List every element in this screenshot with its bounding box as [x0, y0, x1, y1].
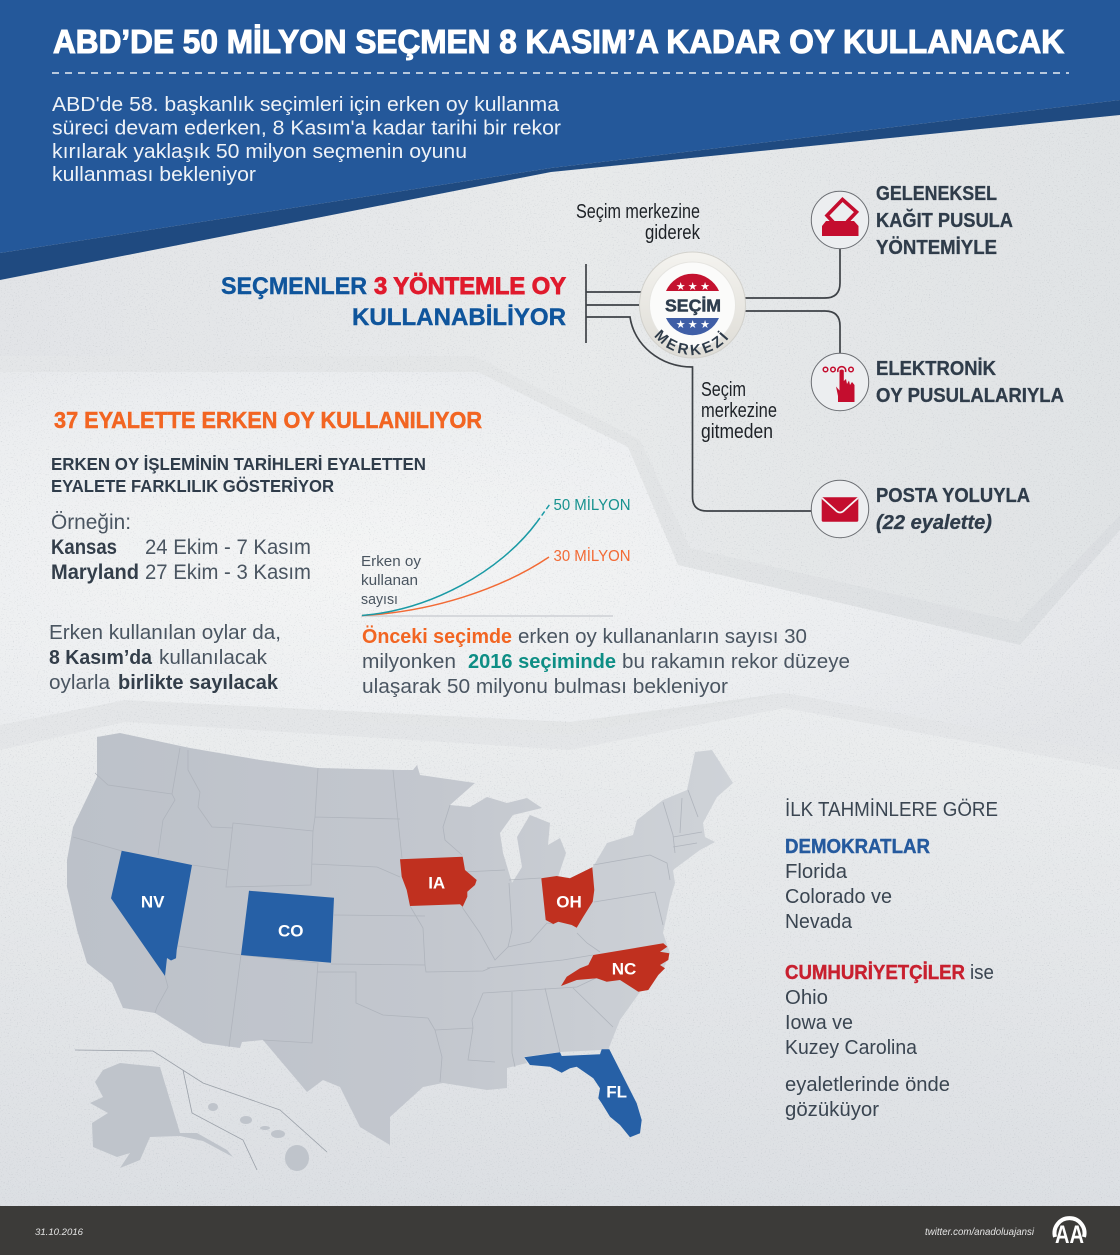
state: North Carolina	[561, 943, 669, 992]
footer	[0, 1206, 1120, 1255]
state: North Carolina: NC	[612, 960, 636, 978]
text: counting of early votes: kullanılacak	[159, 647, 268, 669]
subheading: early voting dates: ERKEN OY İŞLEMİNİN TARİHLERİ EYALETTEN	[51, 454, 426, 474]
logo: AA: AA	[1055, 1221, 1084, 1249]
heading: three methods: 3 YÖNTEMLE OY	[374, 273, 566, 300]
text: state date examples	[51, 511, 311, 584]
text: comparison with previous election: bu rakamın rekor düzeye	[622, 651, 850, 673]
heading: three methods	[221, 273, 566, 331]
state: Ohio	[541, 867, 594, 928]
badge: election centre: ★	[688, 280, 698, 293]
text: comparison with previous election	[362, 625, 850, 698]
date: 31.10.2016	[35, 1227, 84, 1238]
text: comparison with previous election: erken oy kullananların sayısı 30	[518, 626, 807, 648]
label: going to the polling station: Seçim merkezine	[576, 201, 700, 223]
label: paper ballot: KAĞIT PUSULA	[876, 208, 1013, 232]
text: state date examples: Maryland	[51, 561, 139, 584]
label: without going to the polling station: merkezine	[701, 400, 777, 422]
text: counting of early votes: birlikte sayılacak	[118, 672, 279, 694]
Republicans list: CUMHURİYETÇİLER	[785, 961, 966, 984]
label: by mail: POSTA YOLUYLA	[876, 485, 1030, 507]
text: state date examples: 24 Ekim - 7 Kasım	[145, 536, 311, 559]
heading: early voting in 37 states: 37 EYALETTE ERKEN OY KULLANILIYOR	[54, 407, 482, 433]
intro text: kırılarak yaklaşık 50 milyon seçmenin oyunu	[52, 140, 467, 163]
Democrats list: Florida	[785, 861, 848, 883]
line chart: early voters: sayısı	[361, 591, 398, 608]
Democrats list	[785, 836, 931, 933]
text: counting of early votes: oylarla	[49, 672, 111, 694]
state: Iowa: IA	[428, 874, 445, 892]
badge: election centre: MERKEZİ	[654, 330, 728, 356]
label: by mail	[876, 485, 1030, 534]
Republicans list: Ohio	[785, 987, 828, 1009]
Republicans list: Kuzey Carolina	[785, 1037, 918, 1059]
text: first estimates: İLK TAHMİNLERE GÖRE	[785, 798, 998, 821]
state: Colorado: CO	[278, 922, 303, 940]
text: counting of early votes: Erken kullanılan oylar da,	[49, 622, 281, 644]
label: by mail: (22 eyalette)	[876, 512, 992, 534]
text: first estimates: eyaletlerinde önde	[785, 1074, 950, 1096]
state: Nevada: NV	[141, 892, 165, 912]
Republicans list	[785, 961, 994, 1059]
state: Colorado	[241, 891, 334, 963]
state: Florida	[524, 1049, 642, 1137]
badge: election centre: SEÇİM	[665, 296, 721, 316]
badge: election centre: ★	[700, 318, 710, 331]
state: Florida: FL	[606, 1082, 627, 1102]
state: Nevada	[111, 851, 192, 976]
text: first estimates: gözüküyor	[785, 1099, 879, 1121]
line chart: early voters: kullanan	[361, 572, 418, 589]
text: state date examples: Örneğin:	[51, 511, 131, 534]
heading: three methods: KULLANABİLİYOR	[352, 304, 566, 331]
intro text: ABD'de 58. başkanlık seçimleri için erken oy kullanma	[52, 93, 560, 116]
text: counting of early votes: 8 Kasım’da	[49, 647, 153, 669]
label: electronic voting	[876, 357, 1064, 407]
label: without going to the polling station: gitmeden	[701, 421, 773, 443]
header banner	[0, 0, 1120, 280]
text: comparison with previous election: milyonken	[362, 651, 456, 673]
intro text	[52, 93, 561, 186]
Alaska	[90, 1063, 233, 1168]
text: comparison with previous election: Önceki seçimde	[362, 625, 512, 648]
text: comparison with previous election: ulaşarak 50 milyonu bulması bekleniyor	[362, 676, 728, 698]
label: electronic voting: ELEKTRONİK	[876, 357, 997, 380]
label: paper ballot: YÖNTEMİYLE	[876, 236, 997, 259]
line chart: early voters	[361, 495, 630, 616]
Democrats list: DEMOKRATLAR	[785, 836, 931, 858]
Democrats list: Colorado ve	[785, 886, 892, 908]
title: ABD’DE 50 MİLYON SEÇMEN 8 KASIM’A KADAR OY KULLANACAK	[53, 23, 1064, 60]
label: without going to the polling station	[701, 379, 777, 443]
intro text: süreci devam ederken, 8 Kasım'a kadar tarihi bir rekor	[52, 116, 561, 140]
state: Ohio: OH	[556, 892, 582, 912]
Democrats list: Nevada	[785, 911, 853, 933]
badge: election centre: ★	[700, 280, 710, 293]
badge: election centre	[639, 252, 746, 358]
heading: three methods: SEÇMENLER	[221, 273, 367, 300]
intro text: kullanması bekleniyor	[52, 163, 256, 186]
text: first estimates	[785, 798, 998, 1121]
icon: mail envelope	[811, 480, 869, 538]
map: United States	[67, 733, 733, 1171]
label: without going to the polling station: Seçim	[701, 379, 746, 401]
line chart: early voters: 50 MİLYON	[554, 495, 630, 514]
label: going to the polling station	[576, 201, 701, 244]
line chart: early voters: 30 MİLYON	[554, 546, 630, 565]
badge: election centre: ★	[676, 318, 686, 331]
icon: electronic voting	[811, 353, 869, 411]
label: going to the polling station: giderek	[645, 222, 701, 244]
icon: paper ballot	[811, 191, 869, 249]
Republicans list: Iowa ve	[785, 1012, 853, 1034]
Hawaii	[208, 1103, 309, 1171]
label: electronic voting: OY PUSULALARIYLA	[876, 385, 1064, 407]
text: counting of early votes	[49, 622, 281, 694]
badge: election centre: ★	[676, 280, 686, 293]
text: comparison with previous election: 2016 seçiminde	[468, 651, 616, 673]
label: paper ballot	[876, 183, 1013, 259]
label: paper ballot: GELENEKSEL	[876, 183, 997, 205]
Republicans list: ise	[970, 962, 994, 984]
line chart: early voters: Erken oy	[361, 553, 421, 570]
subheading: early voting dates: EYALETE FARKLILIK GÖSTERİYOR	[51, 476, 334, 496]
state: Iowa	[400, 857, 477, 907]
social handle: twitter.com/anadoluajansi	[925, 1226, 1035, 1238]
connector lines	[586, 249, 840, 511]
badge: election centre: ★	[688, 318, 698, 331]
state borders	[73, 748, 702, 1082]
text: state date examples: 27 Ekim - 3 Kasım	[145, 561, 311, 584]
subheading: early voting dates	[51, 454, 426, 496]
text: state date examples: Kansas	[51, 536, 117, 559]
